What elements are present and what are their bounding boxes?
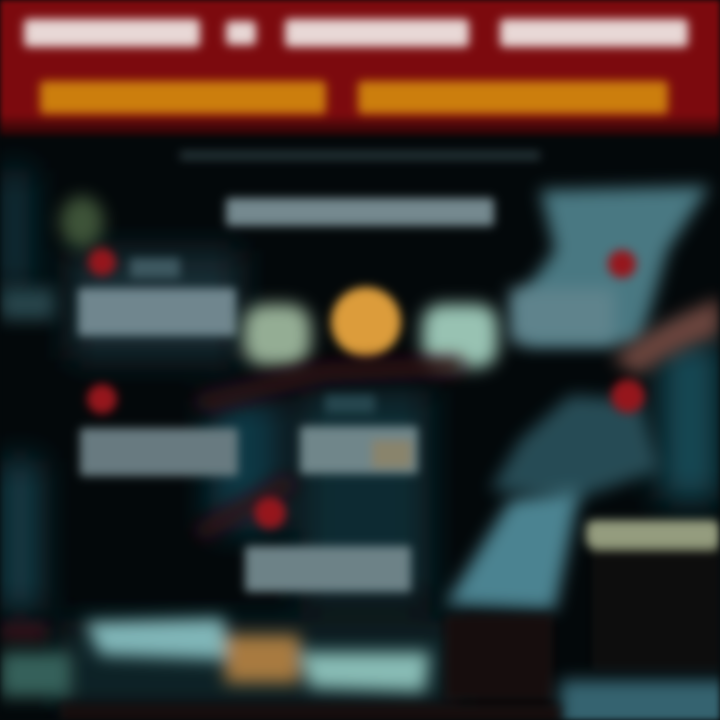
title: second line, orange	[40, 81, 668, 114]
icon: central orange circle	[331, 287, 401, 357]
text block: upper-left label	[78, 258, 236, 336]
object: lower-right blue surface	[560, 680, 720, 720]
header band	[0, 0, 720, 136]
connector: dark red diagonal	[205, 366, 455, 530]
object: dark brown block	[445, 615, 553, 700]
icon: top-left olive blob	[60, 196, 104, 248]
hand reaching in from right	[612, 298, 720, 375]
cup: dark mug with pale rim	[586, 520, 720, 670]
bottom edge shadow	[60, 704, 560, 720]
text block: right of centre	[510, 288, 615, 343]
text block: middle-centre label	[300, 395, 418, 474]
icon: right pale green circle	[422, 304, 498, 368]
panel: right teal card	[518, 186, 710, 345]
panel: lower right light-blue strip	[445, 490, 580, 610]
icon: left pale green circle	[243, 304, 311, 366]
background: teal haze	[0, 170, 720, 710]
subtitle	[180, 150, 540, 161]
marker: red dots	[87, 248, 645, 529]
text block: lower-centre label	[245, 546, 411, 592]
text block: left stub	[0, 288, 55, 320]
panel: top heading box	[226, 198, 494, 226]
keyboard: pale teal shapes	[0, 618, 430, 697]
title: first line, white	[24, 19, 688, 47]
panel: right lower teal card	[490, 395, 660, 500]
text block: middle-left label	[80, 428, 238, 476]
